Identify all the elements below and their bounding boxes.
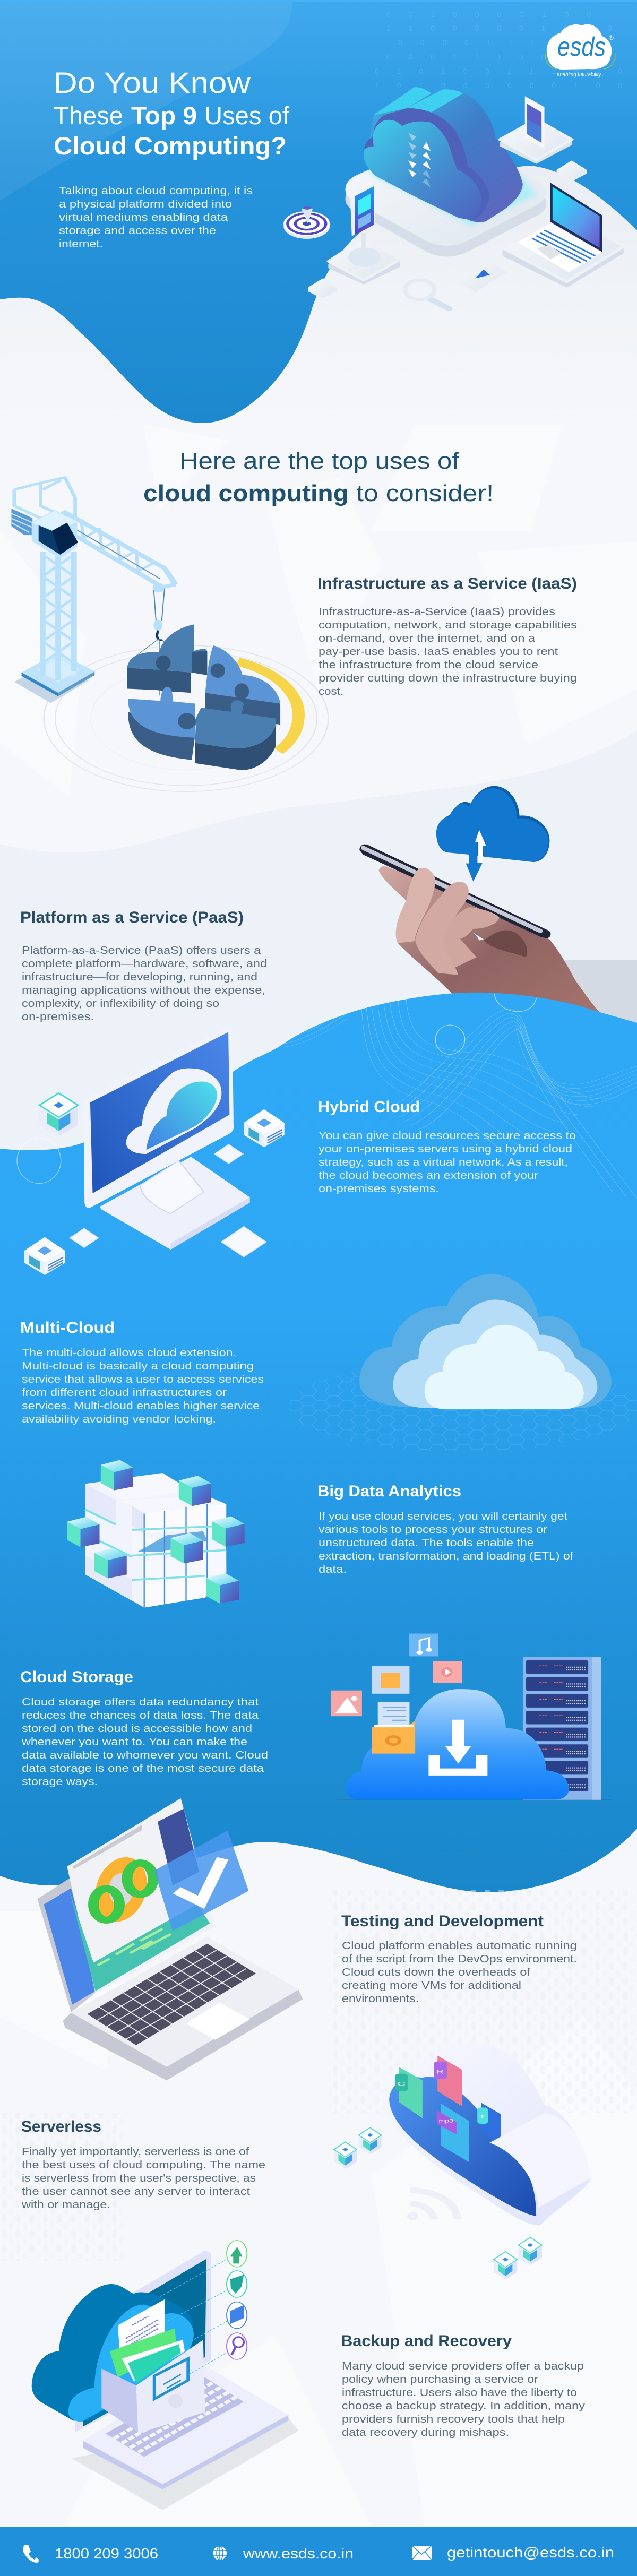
gradient cubes xyxy=(67,1460,245,1604)
serverless text: Finally yet importantly, serverless is one of xyxy=(22,2146,249,2158)
monitor stand xyxy=(99,1157,250,1250)
dashed connectors xyxy=(160,2259,228,2374)
testing text: environments. xyxy=(342,1993,419,2005)
PaaS text: infrastructure—for developing, running, and xyxy=(22,971,257,983)
illustration: hand holding phone with cloud xyxy=(359,786,637,1031)
hero blue background with curved edge xyxy=(0,0,637,423)
blue inner cloud xyxy=(389,2077,536,2216)
hybrid cloud text: your on-premises servers using a hybrid cloud xyxy=(318,1143,572,1155)
laptop base xyxy=(63,1937,303,2080)
main platform xyxy=(346,139,546,256)
section: IaaS xyxy=(11,477,577,791)
server cube top-left xyxy=(39,1093,78,1136)
cube right xyxy=(244,1109,285,1147)
big data text xyxy=(317,1483,573,1575)
target icon xyxy=(283,206,330,239)
drawer xyxy=(101,2340,205,2434)
white block cluster xyxy=(85,1473,226,1608)
hook and cables xyxy=(130,583,191,695)
big data text: Big Data Analytics xyxy=(317,1483,461,1500)
icon: magnifier xyxy=(227,2333,247,2359)
hybrid cloud text: You can give cloud resources secure access to xyxy=(318,1130,576,1142)
cloud with arrows xyxy=(364,87,523,222)
multi-cloud text: service that allows a user to access services xyxy=(22,1374,264,1385)
IaaS text: the infrastructure from the cloud service xyxy=(318,659,538,671)
wifi icon xyxy=(409,2190,457,2219)
hero lighter blob and binary digit pattern: 0 1 0 1 0 0 1 1 1 0 0 0 xyxy=(375,67,630,75)
floor line xyxy=(337,1799,613,1800)
hero title: Top 9 xyxy=(131,101,197,130)
laptop lid and screen xyxy=(37,1877,98,2012)
mp3 and T cards: mp3 xyxy=(439,2118,453,2124)
hexagon mesh xyxy=(288,1362,637,1451)
cloud storage text: Cloud Storage xyxy=(20,1668,133,1686)
hero intro paragraph: storage and access over the xyxy=(59,225,216,237)
hero intro paragraph: a physical platform divided into xyxy=(59,199,232,210)
laptop on platform xyxy=(503,183,624,288)
backup text: policy when purchasing a service or xyxy=(342,2374,538,2385)
green folders xyxy=(110,2328,185,2383)
cloud storage text: storage ways. xyxy=(22,1776,98,1788)
hybrid cloud text: on-premises systems. xyxy=(318,1183,439,1195)
icon: folder xyxy=(227,2302,247,2329)
PaaS text: Platform as a Service (PaaS) xyxy=(20,909,244,926)
multi-cloud text: The multi-cloud allows cloud extension. xyxy=(22,1347,236,1359)
icon: shield xyxy=(227,2271,247,2297)
IaaS text: cost. xyxy=(318,686,343,697)
big data text: data. xyxy=(318,1564,347,1575)
green card C: C xyxy=(397,2081,406,2088)
section: PaaS xyxy=(20,786,637,1031)
outer cloud xyxy=(381,2043,591,2226)
play card xyxy=(454,261,508,292)
hybrid cloud text: Hybrid Cloud xyxy=(318,1098,420,1116)
play tile xyxy=(433,1661,462,1683)
heading: here are the top uses: cloud computing xyxy=(143,480,349,506)
small left tile xyxy=(309,279,337,298)
phone on tile xyxy=(500,96,572,164)
cloud storage text: stored on the cloud is accessible how and xyxy=(22,1723,252,1735)
puzzle cloud pieces xyxy=(127,625,280,770)
hero title: Cloud Computing? xyxy=(54,132,287,160)
PaaS text: complexity, or inflexibility of doing so xyxy=(22,998,219,1010)
section: hybrid cloud xyxy=(24,1027,576,1275)
crane base xyxy=(14,652,94,703)
IaaS text: on-demand, over the internet, and on a xyxy=(318,633,536,644)
hybrid cloud text: the cloud becomes an extension of your xyxy=(318,1170,538,1182)
blue cloud front xyxy=(68,2305,194,2422)
hero title xyxy=(54,66,290,160)
backup text xyxy=(341,2332,585,2439)
logo: esds cloud: esds xyxy=(557,32,606,62)
serverless text: the user cannot see any server to interact xyxy=(22,2186,251,2198)
mp3 and T cards xyxy=(437,2103,501,2162)
multi-cloud text xyxy=(20,1319,264,1425)
front cloud xyxy=(425,1325,584,1409)
heading: here are the top uses xyxy=(143,448,494,506)
pink card R: R xyxy=(436,2069,444,2075)
paper document xyxy=(118,2299,165,2354)
grey backdrop xyxy=(565,960,637,1031)
hill tint behind hero platforms xyxy=(0,159,637,425)
heading: here are the top uses: to consider! xyxy=(356,480,494,506)
multi-cloud text: availability avoiding vendor locking. xyxy=(22,1414,216,1425)
section: big data analytics xyxy=(67,1460,573,1608)
hero intro paragraph: virtual mediums enabling data xyxy=(59,212,228,223)
hybrid cloud text xyxy=(318,1098,576,1195)
subtle dot pattern in light lower area xyxy=(0,1890,637,2261)
icon: phone xyxy=(23,2545,39,2563)
hero intro paragraph xyxy=(59,185,253,250)
image tile xyxy=(331,1691,362,1716)
light lower wave background xyxy=(0,730,637,1221)
icon: globe xyxy=(213,2546,227,2560)
multi-cloud text: Multi-cloud is basically a cloud computing xyxy=(22,1360,254,1372)
blue cloud with up and down arrows xyxy=(436,786,549,882)
heading: here are the top uses: Here are the top uses of xyxy=(179,448,460,474)
cloud on screen xyxy=(126,1069,221,1154)
mp3 and T cards: T xyxy=(479,2114,485,2120)
footer bar xyxy=(0,2527,637,2576)
download cloud xyxy=(346,1689,569,1799)
IaaS text: provider cutting down the infrastructure buying xyxy=(318,673,577,684)
hero intro paragraph: internet. xyxy=(59,238,103,250)
illustration: layered clouds xyxy=(288,1274,637,1451)
serverless text: Serverless xyxy=(21,2118,101,2135)
illustration: data cube xyxy=(67,1460,245,1608)
serverless text: is serverless from the user's perspective, as xyxy=(22,2173,256,2184)
illustration: laptop with DevOps loop xyxy=(37,1798,303,2080)
illustration: monitor with cloud and tiles xyxy=(24,1027,285,1275)
server rack xyxy=(523,1657,601,1800)
email: getintouch@esds.co.in xyxy=(447,2544,614,2561)
section: backup and recovery xyxy=(32,2241,585,2510)
multi-cloud text: services. Multi-cloud enables higher service xyxy=(22,1400,260,1412)
testing text: Cloud cuts down the overheads of xyxy=(342,1967,531,1978)
testing text: of the script from the DevOps environment. xyxy=(342,1953,577,1965)
section: cloud storage xyxy=(20,1634,613,1800)
crane counterweight xyxy=(11,509,32,535)
hero intro paragraph: Talking about cloud computing, it is xyxy=(59,185,253,197)
testing text: Cloud platform enables automatic running xyxy=(342,1940,577,1952)
multi-cloud text: from different cloud infrastructures or xyxy=(22,1387,227,1399)
logo: esds cloud: enabling futurability.. xyxy=(557,71,604,78)
hybrid cloud text: strategy, such as a virtual network. As a result, xyxy=(318,1157,568,1168)
illustration: serverless cloud with file cards xyxy=(381,2043,591,2226)
green card C xyxy=(395,2067,423,2118)
backup text: Many cloud service providers offer a backup xyxy=(342,2360,584,2372)
hero title: Do You Know xyxy=(54,66,251,99)
laptop base xyxy=(83,2364,288,2489)
icon: upload arrow xyxy=(227,2241,247,2267)
hero lighter blob and binary digit pattern: 1 0 1 0 0 0 0 0 0 1 0 0 xyxy=(375,81,630,90)
ground rings xyxy=(44,645,328,791)
IaaS text xyxy=(317,575,577,697)
backup text: infrastructure. Users also have the liberty to xyxy=(342,2387,577,2399)
IaaS text: computation, network, and storage capabilities xyxy=(318,619,577,631)
crane jib xyxy=(14,477,176,587)
illustration: cloud download with server rack xyxy=(331,1634,613,1800)
illustration: isometric cloud platform xyxy=(283,87,624,309)
decorative mesh lines and circles in blue wave xyxy=(17,994,637,1199)
icon: mail xyxy=(412,2546,432,2560)
PaaS text: Platform-as-a-Service (PaaS) offers users a xyxy=(22,945,261,957)
cloud storage text: reduces the chances of data loss. The data xyxy=(22,1710,259,1721)
server cubes near cloud xyxy=(334,2142,357,2169)
outer cloud xyxy=(359,1274,612,1408)
tile right xyxy=(214,1144,243,1164)
big data text: unstructured data. The tools enable the xyxy=(318,1537,534,1549)
hero lighter blob and binary digit pattern: 0 0 1 0 0 0 C 1 0 0 xyxy=(386,10,599,19)
website: www.esds.co.in xyxy=(243,2545,354,2562)
music tile xyxy=(409,1634,438,1656)
tile lower left xyxy=(70,1228,98,1247)
tile lower right xyxy=(221,1227,266,1257)
download arrow and tray xyxy=(428,1720,487,1776)
illustration: laptop, cloud and file drawer xyxy=(32,2241,298,2510)
laptop screen xyxy=(75,2250,211,2432)
blue cloud back xyxy=(32,2284,193,2420)
hero lighter blob and binary digit pattern: 0 0 0 0 1 1 1 1 1 1 xyxy=(398,38,609,47)
section: testing and development xyxy=(37,1798,577,2080)
blue wave background for middle sections xyxy=(0,993,637,1892)
crane tower xyxy=(41,552,76,680)
hero lighter blob and binary digit pattern: 1 1 0 0 0 0 0 1 1 0 0 xyxy=(386,24,620,32)
gear and green infinity loop xyxy=(89,1855,153,1924)
server cube upper xyxy=(519,2237,542,2265)
phone xyxy=(359,845,550,938)
cloud storage text: data available to whomever you want. Cloud xyxy=(22,1750,268,1761)
hero title: Uses of xyxy=(204,101,290,130)
big data text: extraction, transformation, and loading (ETL) of xyxy=(318,1550,573,1562)
cloud storage text xyxy=(20,1668,268,1788)
PaaS text: complete platform—hardware, software, and xyxy=(22,958,267,970)
backup text: providers furnish recovery tools that help xyxy=(342,2414,565,2425)
cube lower left xyxy=(24,1237,65,1275)
server cube pair lower right xyxy=(494,2252,517,2279)
backup text: Backup and Recovery xyxy=(341,2332,512,2350)
serverless text: with or manage. xyxy=(21,2199,110,2211)
right white cloud bulge xyxy=(489,2113,591,2208)
IaaS text: Infrastructure-as-a-Service (IaaS) provides xyxy=(318,606,555,618)
serverless text xyxy=(21,2118,265,2211)
IaaS text: pay-per-use basis. IaaS enables you to rent xyxy=(318,646,558,658)
testing text: creating more VMs for additional xyxy=(342,1980,521,1992)
illustration: crane lifting puzzle cloud xyxy=(11,477,328,791)
PaaS text xyxy=(20,909,267,1023)
pink card R xyxy=(434,2055,462,2106)
IaaS text: Infrastructure as a Service (IaaS) xyxy=(317,575,577,592)
fingers xyxy=(396,868,527,975)
shadow xyxy=(71,2418,298,2510)
yellow arc xyxy=(238,661,298,751)
folder tile xyxy=(372,1666,409,1694)
logo: esds cloud xyxy=(545,24,615,78)
hand xyxy=(378,866,600,1012)
multi-cloud text: Multi-Cloud xyxy=(20,1319,115,1337)
keyboard xyxy=(88,1944,256,2045)
small tile xyxy=(557,161,586,181)
hero lighter blob and binary digit pattern: 0 0 0 1 1 1 0 0 1 0 0 xyxy=(386,53,620,61)
monitor frame xyxy=(83,1027,234,1208)
cyan glow xyxy=(368,152,536,226)
monitor screen xyxy=(90,1032,229,1193)
big data text: various tools to process your structures or xyxy=(318,1524,547,1536)
backup text: data recovery during mishaps. xyxy=(342,2427,509,2439)
backup text: choose a backup strategy. In addition, many xyxy=(342,2400,585,2412)
glass pane with check xyxy=(154,1830,248,1931)
section: multi-cloud xyxy=(20,1274,637,1451)
phone number: 1800 209 3006 xyxy=(55,2545,158,2562)
PaaS text: on-premises. xyxy=(22,1011,94,1023)
middle cloud xyxy=(393,1299,597,1408)
trackpad xyxy=(186,2002,250,2040)
crane cab xyxy=(32,510,78,559)
server cube right xyxy=(359,2127,382,2155)
section: hero xyxy=(54,24,624,309)
magnifier xyxy=(405,280,449,309)
cloud storage text: Cloud storage offers data redundancy that xyxy=(22,1696,259,1708)
hero title: These xyxy=(54,101,123,130)
cloud storage text: whenever you want to. You can make the xyxy=(21,1736,247,1748)
serverless text: the best uses of cloud computing. The name xyxy=(22,2159,265,2171)
PaaS text: managing applications without the expense, xyxy=(22,985,265,996)
application window xyxy=(67,1798,216,1994)
kiosk on tile xyxy=(328,185,400,285)
section: serverless xyxy=(21,2043,591,2279)
cloud storage text: data storage is one of the most secure data xyxy=(22,1763,264,1774)
hero lighter blob and binary digit pattern xyxy=(0,0,637,201)
big data text: If you use cloud services, you will certainly get xyxy=(318,1511,568,1522)
testing text: Testing and Development xyxy=(341,1912,544,1930)
server cubes and wifi xyxy=(334,2127,542,2279)
testing text xyxy=(341,1912,577,2005)
logo: esds cloud: ® xyxy=(609,34,614,41)
document and orange folder xyxy=(372,1702,415,1754)
